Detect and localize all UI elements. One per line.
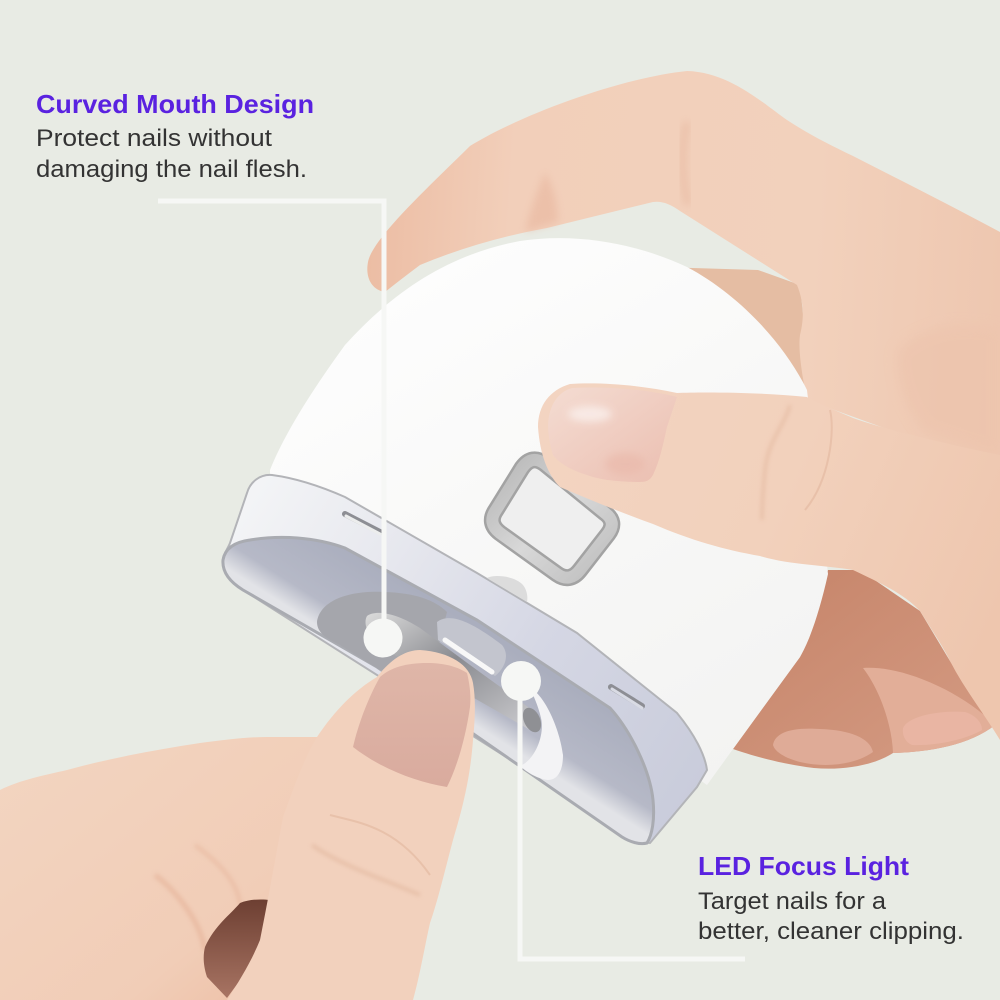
thumbnail bbox=[353, 663, 470, 787]
palm and fingers bbox=[0, 737, 320, 1000]
centre piece bbox=[437, 618, 506, 676]
nail pink area bbox=[605, 453, 645, 475]
blade hole bbox=[519, 705, 545, 735]
marker dot: LED bbox=[501, 661, 541, 701]
heading: LED Focus Light bbox=[698, 851, 909, 881]
nail clipper device bbox=[223, 238, 828, 844]
thumbnail bbox=[548, 387, 677, 482]
knuckle crease bbox=[805, 410, 832, 510]
finger fold bbox=[155, 875, 205, 950]
knuckle crease bbox=[330, 815, 430, 875]
finger fold bbox=[195, 845, 240, 905]
knuckle shadow bbox=[525, 172, 558, 232]
marker dot: curved mouth bbox=[364, 618, 402, 658]
vent slot bbox=[345, 514, 380, 534]
leader line: curved mouth design bbox=[158, 201, 384, 640]
centre highlight bbox=[445, 640, 492, 672]
device body bbox=[270, 238, 828, 785]
rim band bbox=[223, 475, 707, 843]
bottom face bbox=[223, 537, 654, 844]
heading: Curved Mouth Design bbox=[36, 89, 314, 119]
fingernail bbox=[773, 729, 873, 765]
finger crease shadow bbox=[683, 122, 688, 205]
nail highlight bbox=[568, 406, 612, 422]
square power button bbox=[492, 460, 612, 578]
knuckle crease bbox=[312, 845, 420, 895]
fingernail bbox=[903, 712, 982, 745]
rear tab bbox=[487, 576, 527, 602]
hand: upper right holding the device bbox=[367, 71, 1000, 470]
description: better, cleaner clipping. bbox=[698, 918, 964, 945]
hand: lower right fingers bbox=[733, 570, 995, 769]
steel blade bbox=[366, 613, 540, 731]
knuckle crease bbox=[762, 405, 790, 520]
description: damaging the nail flesh. bbox=[36, 156, 307, 183]
cutter head disc bbox=[317, 592, 447, 670]
little finger bbox=[863, 668, 995, 753]
palm shading bbox=[897, 325, 1000, 455]
thumb bbox=[227, 650, 475, 1000]
callout: curved mouth design bbox=[36, 89, 314, 183]
white cutter cover bbox=[520, 688, 563, 780]
middle finger behind device bbox=[660, 267, 812, 400]
dark gap between fingers bbox=[204, 899, 270, 998]
description: Protect nails without bbox=[36, 125, 272, 152]
index finger and palm bbox=[367, 71, 1000, 470]
leader line: LED focus light bbox=[520, 680, 745, 959]
hand: middle thumb pressing button bbox=[538, 383, 1000, 740]
vent slot bbox=[611, 687, 642, 708]
description: Target nails for a bbox=[698, 888, 887, 915]
callout: LED focus light bbox=[698, 851, 964, 945]
hand: lower left holding blade bbox=[0, 650, 475, 1000]
